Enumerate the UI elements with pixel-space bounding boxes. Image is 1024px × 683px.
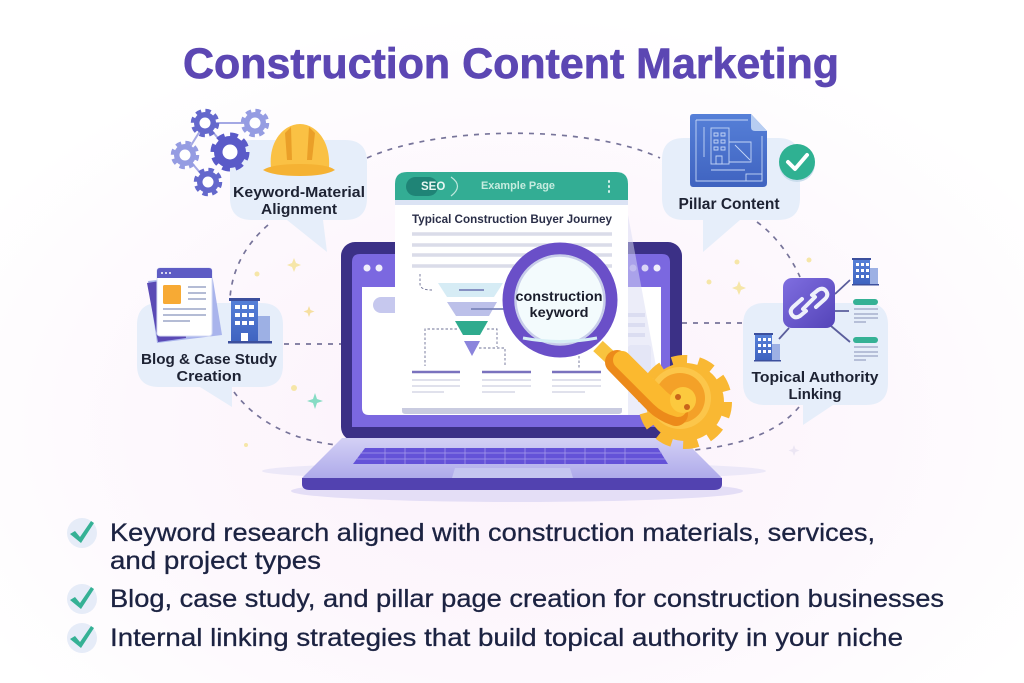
speech bubble [137, 303, 283, 407]
panel: keyword-material alignment [172, 110, 367, 252]
bullet 3: Internal linking strategies that build topical authority in your niche [110, 624, 903, 652]
label: Keyword-Material [233, 185, 365, 201]
bullet 1: Keyword research aligned with construction materials, services, [110, 519, 875, 547]
gear hub [670, 387, 696, 413]
page heading: Typical Construction Buyer Journey [412, 212, 612, 226]
lens: keyword [530, 304, 588, 320]
icon: green check badge [779, 144, 815, 182]
lens [508, 248, 612, 352]
lens: construction [516, 288, 602, 304]
label: Topical Authority [752, 370, 878, 386]
laptop screen [341, 242, 682, 441]
icon: chain link tile [783, 278, 835, 328]
gear [643, 360, 727, 444]
panel: blog and case study creation [137, 268, 283, 407]
page sheet [395, 180, 628, 408]
benefits checklist [67, 518, 944, 653]
panel: topical authority linking [743, 258, 888, 425]
page header: SEO [421, 181, 445, 193]
bottom columns [412, 372, 601, 392]
panel: pillar content [662, 114, 815, 252]
text lines [412, 234, 612, 266]
title: Construction Content Marketing [183, 40, 839, 88]
icon: network of gears [172, 110, 268, 194]
label: Alignment [261, 202, 337, 218]
laptop base [302, 438, 722, 490]
icon: building top right [852, 258, 879, 286]
icon: stacked article pages [147, 268, 222, 343]
speech bubble [662, 138, 800, 252]
funnel chart [420, 274, 579, 368]
speech bubble [743, 303, 888, 425]
icon: hard hat [263, 124, 335, 176]
handle [598, 346, 678, 414]
icon: blueprint document [690, 114, 767, 187]
laptop illustration [262, 242, 766, 502]
example page [395, 172, 665, 415]
icon: content snippets [853, 299, 878, 360]
label: Creation [176, 369, 242, 385]
dashed connectors [230, 133, 800, 450]
link lines [779, 280, 850, 342]
icon: office building [228, 298, 272, 344]
bullet 1: and project types [110, 547, 321, 575]
decorative sparkles [244, 258, 812, 456]
laptop shadow [262, 462, 766, 502]
label: Blog & Case Study [141, 352, 277, 368]
bullet 2: Blog, case study, and pillar page creation for construction businesses [110, 585, 944, 613]
keyboard [353, 448, 668, 464]
icon: building left [754, 333, 781, 362]
page header: Example Page [481, 180, 555, 192]
magnifying glass with gear [508, 248, 727, 444]
label: Pillar Content [678, 196, 780, 213]
page header [395, 172, 628, 205]
bullet 1 [67, 518, 875, 575]
label: Linking [788, 387, 842, 403]
speech bubble [230, 140, 367, 252]
